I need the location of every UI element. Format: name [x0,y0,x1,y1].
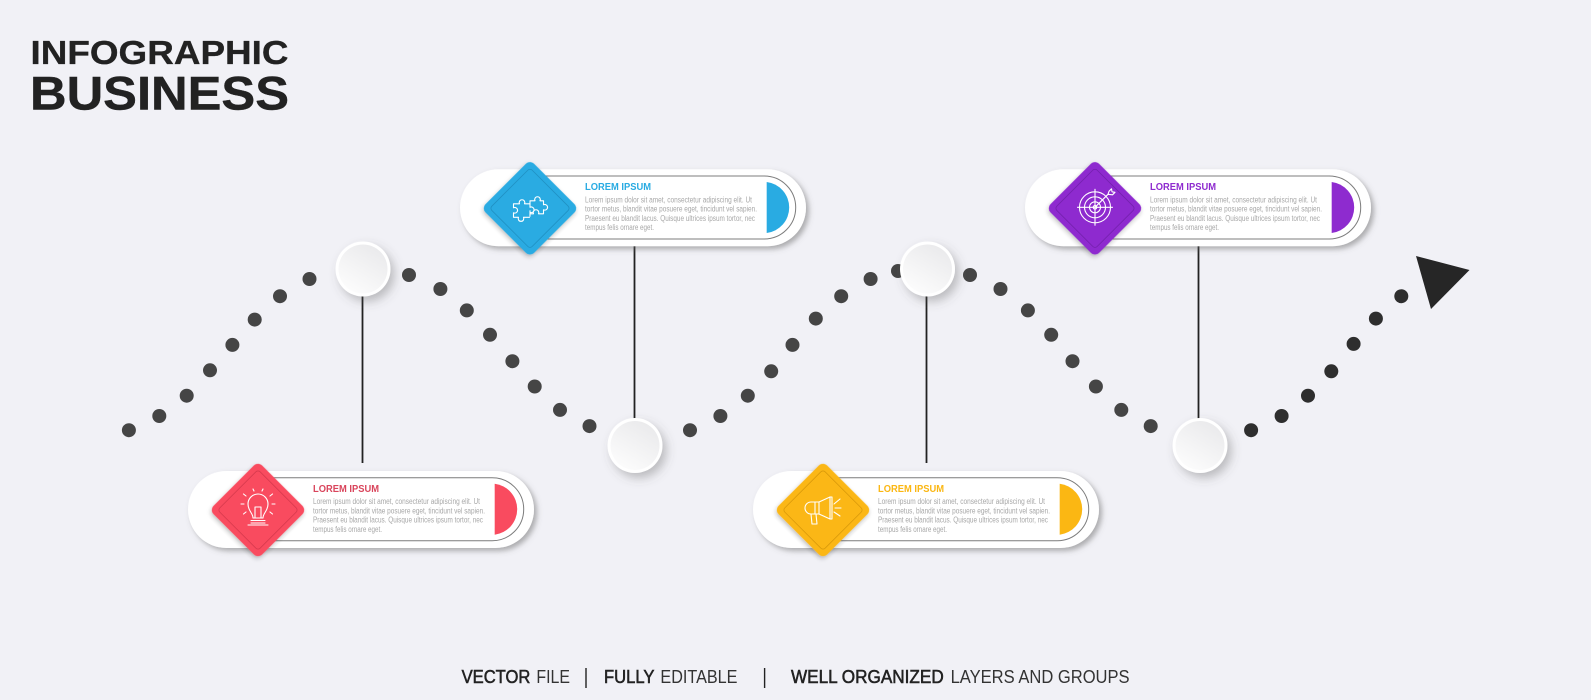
text block: tempus felis ornare eget. [313,525,382,534]
node circle 3 [900,242,955,296]
heading: LOREM IPSUM [585,181,651,193]
text block: Lorem ipsum dolor sit amet, consectetur adipiscing elit. Ut [1150,195,1318,204]
node circle 1 [336,242,390,296]
node circle 2 [608,418,662,473]
title: BUSINESS [30,66,289,120]
footer caption: FULLY [604,667,654,687]
text block: Lorem ipsum dolor sit amet, consectetur adipiscing elit. Ut [878,497,1046,506]
diamond badge [1046,160,1144,257]
icon: puzzle [514,197,548,221]
icon: lightbulb [241,489,275,525]
panel: purple target card [1025,160,1371,257]
text block: Praesent eu blandit lacus. Quisque ultrices ipsum tortor, nec [313,516,483,525]
footer caption: LAYERS AND GROUPS [951,667,1130,687]
dotted zigzag path [122,264,1408,437]
text block: tempus felis ornare eget. [878,525,947,534]
text block: Praesent eu blandit lacus. Quisque ultrices ipsum tortor, nec [1150,214,1320,223]
text block: tortor metus, blandit vitae posuere eget, tincidunt vel sapien. [585,205,757,214]
text block: tempus felis ornare eget. [585,223,654,232]
text block: tortor metus, blandit vitae posuere eget, tincidunt vel sapien. [878,506,1050,515]
node circle 4 [1172,418,1228,473]
text block [313,497,485,534]
heading: LOREM IPSUM [313,483,379,495]
footer caption: FILE [536,667,570,687]
text block [878,497,1050,534]
panel: red lightbulb card [188,461,534,559]
connector lines [362,246,1198,463]
icon: megaphone [805,497,841,524]
title: INFOGRAPHIC [30,34,288,71]
text block [585,195,757,232]
panel: blue puzzle card [460,160,806,257]
text block: Praesent eu blandit lacus. Quisque ultrices ipsum tortor, nec [878,516,1048,525]
text block: tortor metus, blandit vitae posuere eget, tincidunt vel sapien. [1150,205,1322,214]
arrow head [1416,256,1470,309]
footer caption: EDITABLE [660,667,738,687]
diamond badge [209,461,307,559]
heading: LOREM IPSUM [878,483,944,495]
footer caption [462,667,1130,688]
text block: tortor metus, blandit vitae posuere eget, tincidunt vel sapien. [313,506,485,515]
title [30,34,289,120]
text block: Praesent eu blandit lacus. Quisque ultrices ipsum tortor, nec [585,214,755,223]
icon: target [1078,189,1115,225]
diamond badge [774,461,872,559]
footer caption: WELL ORGANIZED [791,667,944,687]
footer caption: VECTOR [462,667,530,687]
text block: tempus felis ornare eget. [1150,223,1219,232]
heading: LOREM IPSUM [1150,181,1216,193]
text block [1150,195,1322,232]
text block: Lorem ipsum dolor sit amet, consectetur adipiscing elit. Ut [585,195,753,204]
text block: Lorem ipsum dolor sit amet, consectetur adipiscing elit. Ut [313,497,481,506]
panel: yellow megaphone card [753,461,1099,559]
diamond badge [481,160,579,257]
